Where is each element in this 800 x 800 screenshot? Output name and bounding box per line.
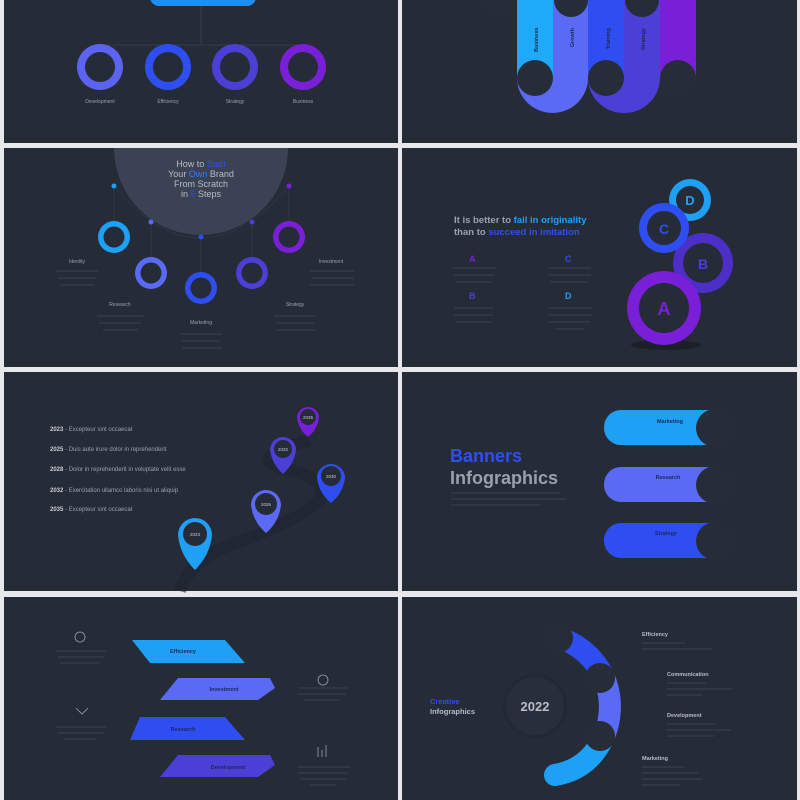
items: C (565, 254, 572, 264)
circle: Efficiency (145, 44, 191, 105)
panel: vertical bands slide: Business (534, 28, 540, 52)
circles (627, 179, 733, 350)
heading (168, 159, 234, 199)
circle: Strategy: Strategy (226, 99, 245, 105)
circle: Development (77, 44, 123, 105)
heading: Your Own Brand (168, 169, 234, 179)
arc (555, 638, 610, 775)
title: Creative (430, 697, 460, 706)
quote: than to succeed in imitation (454, 227, 580, 238)
timeline list: 2028 - Dolor in reprehenderit in voluptate velit esse (50, 467, 186, 473)
panel: vertical bands slide: Strategy (641, 27, 647, 50)
circle: Business: Business (293, 99, 314, 105)
step labels (69, 259, 344, 326)
banner: Research (604, 466, 734, 504)
bars: Investment (209, 687, 239, 693)
banner: Strategy (604, 522, 734, 560)
quote (454, 215, 587, 238)
labels: Communication (667, 672, 709, 678)
banner: Research: Research (656, 475, 681, 481)
step labels: Research (109, 302, 131, 308)
panel: banners slide (402, 372, 797, 591)
banner: Strategy: Strategy (655, 531, 678, 537)
step labels: Strategy (286, 302, 305, 308)
bars: Research (171, 727, 196, 733)
step circles (98, 221, 305, 304)
circle: Development: Development (85, 99, 115, 105)
side icons and text (75, 632, 328, 757)
banner: Marketing (604, 409, 734, 447)
center circle (503, 674, 567, 738)
title (450, 446, 558, 488)
labels: Development (667, 713, 702, 719)
panel: vertical bands slide: Growth (570, 27, 576, 47)
circles: A (658, 299, 670, 319)
bars: Development (211, 765, 245, 771)
panel: 2022 arc slide (402, 597, 797, 800)
title (430, 697, 475, 716)
timeline list: 2023 - Excepteur sint occaecat (50, 427, 133, 433)
bars: Efficiency (170, 649, 197, 655)
step labels: Identity (69, 259, 86, 265)
title: Banners (450, 446, 522, 466)
dark circles (483, 0, 696, 96)
panel: vertical bands slide: Training (606, 28, 612, 49)
panel: quote ABCD slide (402, 148, 797, 367)
title: Infographics (450, 468, 558, 488)
step labels: Marketing (190, 320, 212, 326)
items: D (565, 291, 572, 301)
items (469, 254, 572, 301)
items: A (469, 254, 476, 264)
pins: 2026 (261, 502, 272, 507)
title: Infographics (430, 707, 475, 716)
heading: in 5 Steps (181, 189, 222, 199)
panel: org chart slide (4, 0, 398, 143)
center circle: 2022 (521, 699, 549, 714)
quote: It is better to fail in originality (454, 215, 587, 226)
circle: Efficiency: Efficiency (157, 99, 179, 105)
bars (130, 640, 275, 777)
labels (642, 632, 709, 762)
timeline list: 2032 - Exercitation ullamco laboris nisi ut aliquip (50, 488, 179, 494)
items: B (469, 291, 476, 301)
timeline list (50, 427, 186, 513)
panel: vertical bands slide (402, 0, 797, 143)
pins: 2032 (278, 447, 289, 452)
banner: Marketing: Marketing (657, 419, 683, 425)
circles: D (685, 193, 695, 208)
pins (178, 407, 345, 570)
heading: From Scratch (174, 179, 228, 189)
circle: Business (280, 44, 326, 105)
step labels: Investment (319, 259, 344, 265)
labels: Efficiency (642, 632, 669, 638)
panel: parallelogram slide (4, 597, 398, 800)
labels: Marketing (642, 756, 668, 762)
circle: Strategy (212, 44, 258, 105)
timeline list: 2025 - Duis aute irure dolor in reprehenderit (50, 447, 167, 453)
heading: How to Start (176, 159, 226, 169)
pins: 2030 (326, 474, 337, 479)
pins: 2023 (190, 532, 201, 537)
top pill (150, 0, 256, 6)
circles: C (659, 221, 669, 237)
circles: B (698, 256, 708, 272)
timeline list: 2035 - Excepteur sint occaecat (50, 507, 133, 513)
panel: brand steps slide (4, 148, 398, 367)
pins: 2035 (303, 415, 314, 420)
panel: timeline pins slide (4, 372, 398, 591)
